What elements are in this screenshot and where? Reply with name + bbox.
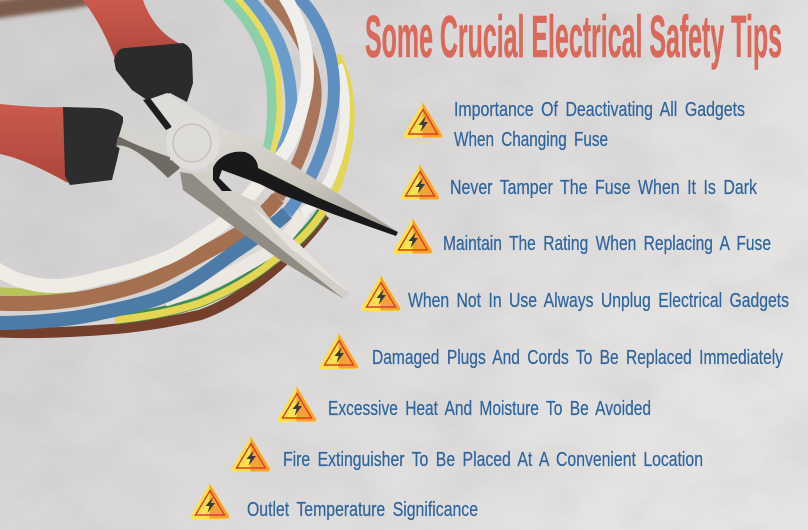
icon: warning triangle bbox=[320, 335, 358, 368]
pivot rivet bbox=[166, 116, 220, 170]
wire: upper outer white bbox=[303, 65, 345, 213]
tip 3 bbox=[394, 220, 771, 255]
icon: warning triangle bbox=[191, 485, 229, 518]
wire: inner white upper bbox=[262, 0, 308, 180]
wire: outer blue lower bbox=[0, 213, 287, 323]
lower black grip bbox=[63, 107, 123, 185]
wire: yellow outer green edge bbox=[115, 212, 322, 319]
wire: outer blue upper bbox=[287, 0, 334, 213]
wire: yellow outer bbox=[115, 55, 351, 320]
needle-nose pliers bbox=[0, 0, 398, 299]
wire: inner green bbox=[227, 0, 273, 165]
tip 4 bbox=[362, 277, 789, 312]
icon: warning triangle bbox=[404, 104, 442, 137]
lower jaw bbox=[180, 172, 349, 299]
wire: inner white lower bbox=[0, 180, 262, 286]
icon: warning triangle bbox=[232, 438, 270, 471]
upper red handle bbox=[83, 0, 181, 62]
tip 1 bbox=[404, 98, 745, 151]
tip 8 bbox=[191, 485, 478, 521]
icon: warning triangle bbox=[278, 388, 316, 421]
icon: warning triangle bbox=[362, 277, 400, 310]
upper black grip bbox=[114, 43, 193, 102]
black jaw gripping edge and opening bbox=[213, 152, 398, 236]
tip 5 bbox=[320, 335, 784, 369]
tip 2 bbox=[401, 166, 758, 199]
wire: inner yellow stripe bbox=[236, 0, 280, 160]
lower red handle bbox=[0, 104, 68, 183]
upper jaw bbox=[170, 117, 398, 232]
wire: yellow-green left piece bbox=[0, 291, 70, 295]
icon: warning triangle bbox=[394, 220, 432, 253]
wire: inner brown upper bbox=[268, 0, 316, 198]
text: tip 1: When Changing Fuse bbox=[454, 128, 608, 151]
wire: dark brown outer bbox=[0, 215, 325, 333]
wire: lower white bbox=[165, 213, 303, 300]
text: tip 8: Outlet Temperature Significance bbox=[247, 498, 478, 521]
rear metal arms bbox=[147, 93, 207, 135]
icon: warning triangle bbox=[401, 166, 439, 199]
tip 6 bbox=[278, 388, 651, 421]
text: tip 6: Excessive Heat And Moisture To Be Avoided bbox=[328, 397, 651, 420]
wire: inner blue bbox=[247, 0, 291, 158]
tip 7 bbox=[232, 438, 703, 471]
wire: inner brown lower bbox=[0, 198, 278, 304]
text: tip 1 bbox=[454, 98, 745, 151]
coiled electrical wires bbox=[0, 0, 351, 333]
